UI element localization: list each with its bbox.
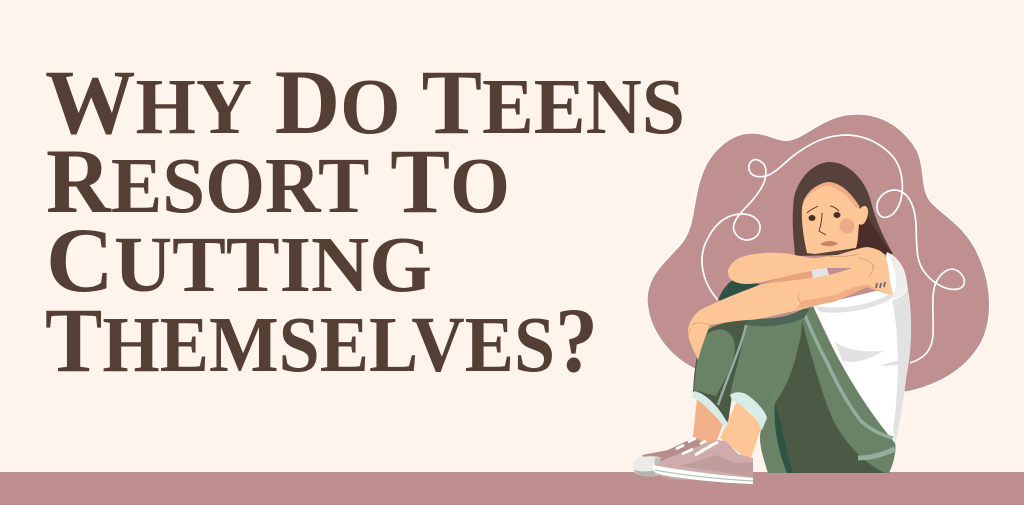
forehead shadow [802, 182, 860, 208]
hair shadow [850, 205, 892, 254]
eyebrows and nose [807, 206, 839, 235]
eyes [808, 212, 840, 221]
white t-shirt [813, 252, 911, 445]
back leg darkest fold [775, 403, 793, 473]
back shoe [642, 437, 716, 472]
front shoe sole [653, 465, 753, 484]
hand over elbow [845, 259, 891, 295]
background blob [647, 114, 990, 392]
title: THEMSELVES? [45, 289, 598, 391]
cheeks [840, 218, 854, 234]
illustration: sad teen sitting [633, 114, 990, 484]
front shoe upper [653, 440, 753, 480]
arm shadow between arms [763, 271, 812, 284]
shin stripe [718, 325, 746, 405]
back leg dark fold [775, 320, 885, 473]
sleeve shadow [887, 252, 907, 298]
pants cuffs [692, 391, 767, 430]
hair [793, 162, 893, 256]
back leg [760, 306, 896, 473]
shirt shadows [815, 286, 911, 445]
title: RESORT TO [46, 130, 510, 232]
title [45, 51, 685, 391]
fingernails [876, 282, 885, 288]
far pants leg, dark knee [718, 279, 760, 302]
lower arm shading [796, 285, 893, 309]
front ankle [720, 401, 762, 461]
upper forearm [728, 247, 889, 284]
face [802, 182, 868, 254]
shin dark base [693, 320, 750, 423]
knee band shadow [747, 308, 810, 326]
floor band [0, 472, 1024, 505]
right shin green [730, 320, 802, 417]
finger and elbow lines [688, 254, 875, 338]
left shin green [694, 329, 735, 396]
shirt sleeve gap [811, 268, 829, 278]
title: WHY DO TEENS [45, 51, 685, 153]
white squiggle line [702, 135, 964, 363]
back ankle [693, 398, 723, 447]
shoelaces [676, 438, 718, 455]
lower arm [688, 260, 893, 360]
back leg stripes [804, 313, 893, 438]
mouth [820, 241, 838, 246]
title: CUTTING [46, 209, 432, 311]
back shoe sole [633, 456, 660, 476]
front shoe tongue shadow [680, 455, 753, 477]
